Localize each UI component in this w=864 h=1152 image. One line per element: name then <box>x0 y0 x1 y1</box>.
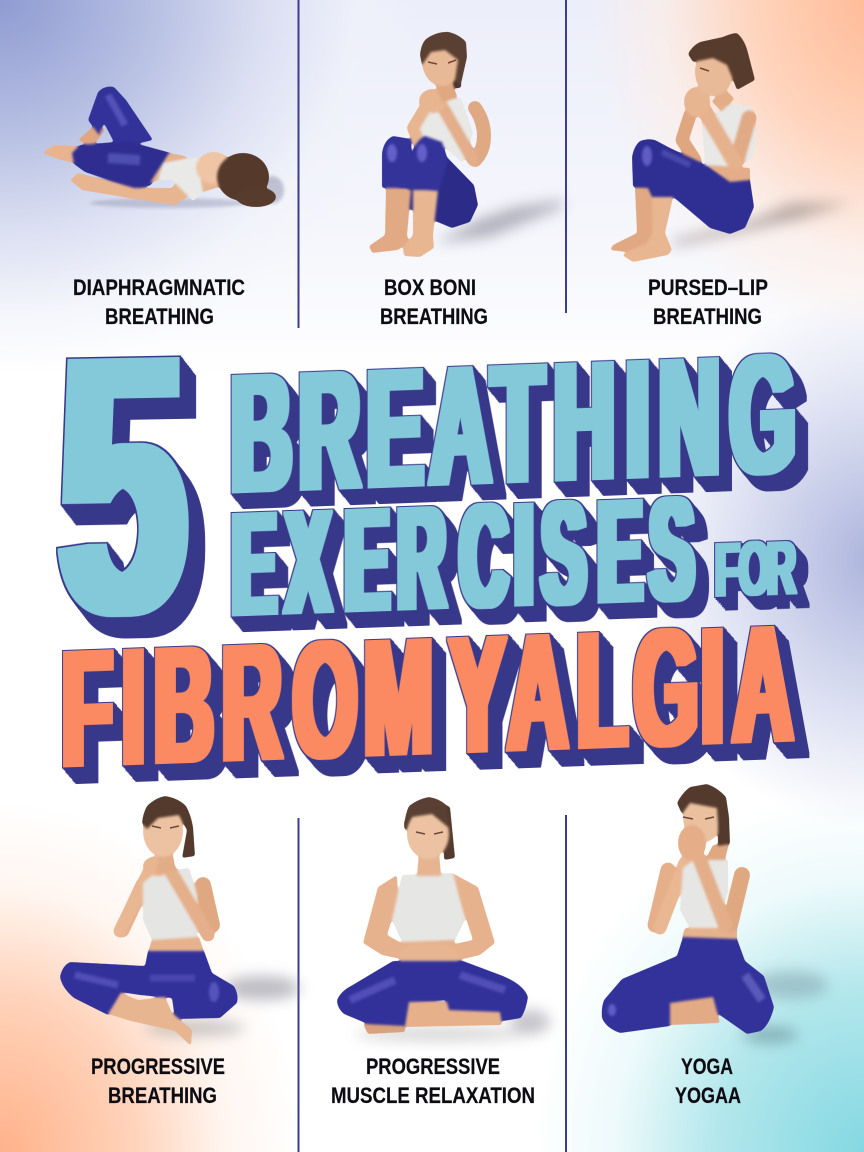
figure: pursed-lip breathing, seated with knees up <box>610 33 850 262</box>
divider lines <box>298 0 566 1152</box>
label: progressive breathing <box>91 1054 225 1108</box>
label: yoga: YOGA <box>681 1054 733 1079</box>
label: progressive breathing: PROGRESSIVE <box>91 1054 225 1079</box>
title numeral 5: 5 <box>60 279 186 691</box>
label: diaphragmatic breathing <box>73 275 245 329</box>
figure: progressive breathing, cross-legged <box>60 796 300 1046</box>
label: pursed-lip breathing: BREATHING <box>653 304 762 329</box>
label: box breathing <box>380 275 488 329</box>
label: progressive muscle relaxation: PROGRESSIVE <box>366 1054 500 1079</box>
label: diaphragmatic breathing: BREATHING <box>105 304 214 329</box>
figure: yoga, seated with hands at nose <box>602 784 828 1043</box>
label: yoga <box>675 1054 741 1108</box>
label: pursed-lip breathing: PURSED–LIP <box>648 275 768 300</box>
labels <box>73 275 768 1108</box>
title word EXERCISES: EXERCISES <box>232 467 694 646</box>
label: pursed-lip breathing <box>648 275 768 329</box>
label: box breathing: BOX BONI <box>384 275 476 300</box>
label: progressive breathing: BREATHING <box>108 1083 217 1108</box>
title word FOR: FOR <box>715 525 796 612</box>
title word BREATHING: BREATHING <box>231 321 795 529</box>
label: box breathing: BREATHING <box>380 304 488 329</box>
figure: box breathing, seated with knees up <box>369 32 563 257</box>
label: progressive muscle relaxation: MUSCLE RELAXATION <box>331 1083 535 1108</box>
label: progressive muscle relaxation <box>331 1054 535 1108</box>
figure: diaphragmatic breathing, lying down <box>42 87 284 208</box>
title <box>60 279 796 801</box>
label: diaphragmatic breathing: DIAPHRAGMNATIC <box>73 275 245 300</box>
figure: progressive muscle relaxation, cross-legged <box>337 797 550 1040</box>
label: yoga: YOGAA <box>675 1083 741 1108</box>
title word FIBROMYALGIA: FIBROMYALGIA <box>62 591 793 801</box>
